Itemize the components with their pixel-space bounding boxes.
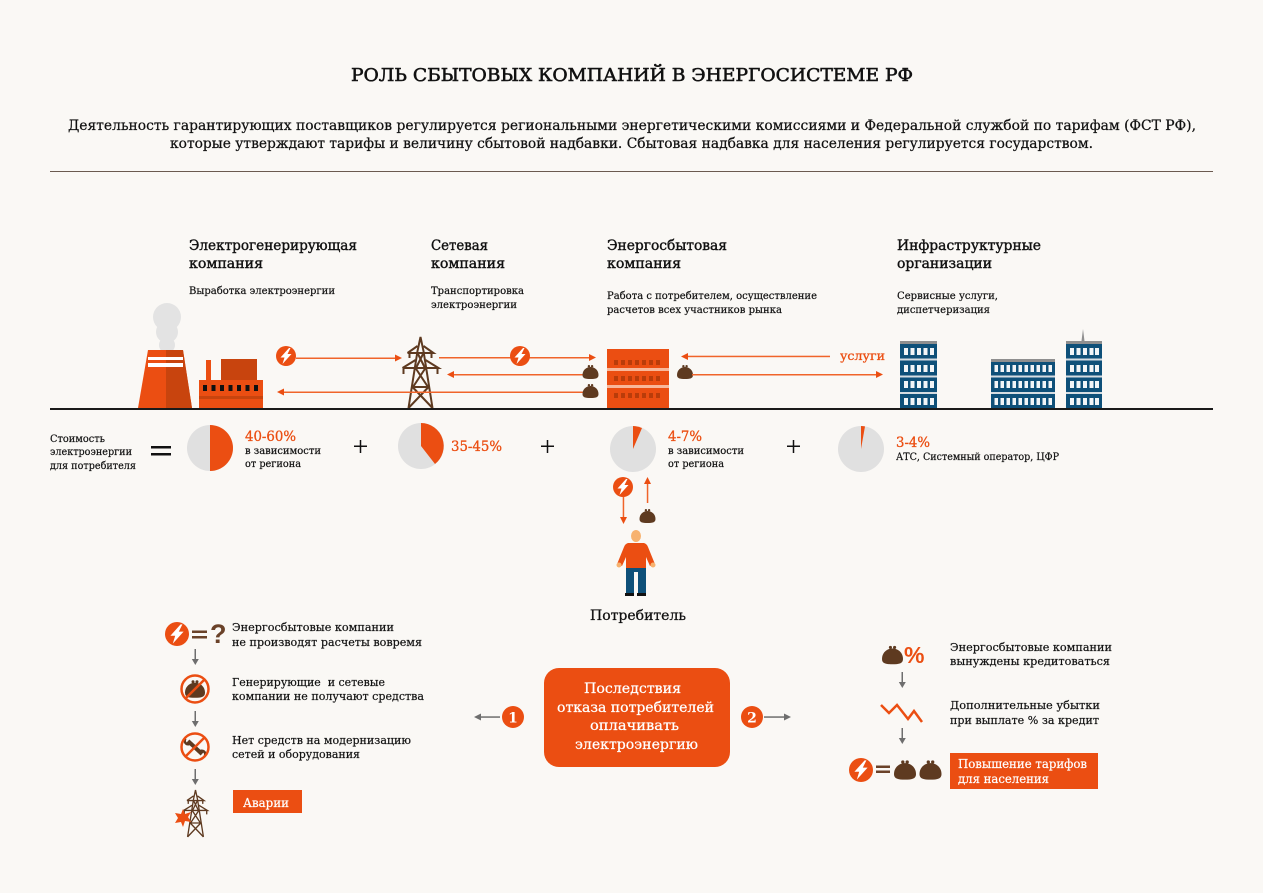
arrow: payment to plant: [277, 384, 598, 398]
heading: generating company: Электрогенерирующая: [189, 238, 357, 254]
arrow: electricity to consumer: [613, 477, 633, 524]
text: extra losses: Дополнительные убытки: [950, 699, 1100, 712]
cost label: Стоимость: [50, 434, 106, 445]
pie: generation share: 40-60%: [245, 429, 296, 445]
badge 1 with arrow: 1: [508, 710, 518, 726]
icon: retail company building: [607, 349, 669, 408]
plus: [354, 440, 367, 453]
intro text: которые утверждают тарифы и величину сбытовой надбавки. Сбытовая надбавка для населения регулируется государством.: [170, 136, 1093, 152]
icon: consumer: [616, 530, 656, 596]
pie: grid share: 35-45%: [451, 439, 502, 455]
heading: infrastructure organisations: Сервисные услуги,: [897, 291, 998, 302]
text: extra losses: [950, 699, 1100, 727]
arrow: payment to infrastructure: [677, 365, 883, 379]
heading: generating company: Выработка электроэнергии: [189, 286, 335, 297]
label: tariff increase: [950, 753, 1098, 789]
text: no modernisation funds: сетей и оборудования: [232, 748, 360, 761]
heading: grid company: компания: [431, 256, 505, 272]
icon: damaged tower: [175, 790, 207, 837]
arrow: [899, 672, 906, 688]
panel: consequences: отказа потребителей: [557, 700, 714, 716]
badge 2 with arrow: 2: [747, 710, 757, 726]
arrow: services from infrastructure: услуги: [840, 348, 885, 363]
label: consumer: Потребитель: [590, 608, 686, 624]
panel: consequences: [544, 668, 730, 767]
pie: infrastructure share: АТС, Системный оператор, ЦФР: [896, 452, 1059, 463]
arrow: payment from consumer: [640, 477, 656, 523]
pie: retail share: 4-7%: [668, 429, 702, 445]
icon: infrastructure building 3: [1066, 329, 1102, 408]
text: companies get no funds: Генерирующие и сетевые: [232, 676, 385, 689]
badge 1 with arrow: [474, 706, 524, 728]
cost label: [50, 434, 136, 472]
heading: infrastructure organisations: Инфраструктурные: [897, 238, 1041, 254]
plus: [787, 440, 800, 453]
icon: electricity equals two purses: [849, 758, 942, 782]
icon: purse and percent: [882, 642, 924, 668]
intro text: [68, 118, 1196, 152]
heading: grid company: Сетевая: [431, 238, 488, 254]
panel: consequences: электроэнергию: [575, 737, 698, 753]
text: no timely payments: Энергосбытовые компании: [232, 621, 394, 634]
pie: generation share: от региона: [245, 459, 301, 470]
pie: retail share: в зависимости: [668, 446, 744, 457]
text: no modernisation funds: [232, 734, 411, 761]
arrow: services from infrastructure: [681, 348, 885, 363]
arrow: [192, 711, 199, 727]
heading: retail company: расчетов всех участников рынка: [607, 305, 782, 316]
ground line: [50, 408, 1213, 410]
cost label: для потребителя: [50, 461, 136, 472]
arrow: electricity from plant to grid: [276, 346, 402, 366]
label: accidents: Аварии: [243, 796, 289, 810]
icon: factory: [199, 359, 263, 408]
pie: generation share: в зависимости: [245, 446, 321, 457]
icon: falling chart: [881, 705, 922, 722]
icon: no repairs: [182, 734, 208, 760]
heading: infrastructure organisations: [897, 238, 1041, 316]
icon: no money: [182, 676, 208, 702]
heading: retail company: Работа с потребителем, осуществление: [607, 291, 817, 302]
badge 2 with arrow: [741, 706, 791, 728]
panel: consequences: Последствия: [584, 681, 681, 697]
equals sign: [151, 446, 171, 456]
heading: generating company: [189, 238, 357, 297]
heading: infrastructure organisations: организации: [897, 256, 992, 272]
text: forced to borrow: Энергосбытовые компании: [950, 641, 1112, 654]
pie: infrastructure share: 3-4%: [896, 435, 930, 451]
text: companies get no funds: компании не получают средства: [232, 690, 424, 703]
title: РОЛЬ СБЫТОВЫХ КОМПАНИЙ В ЭНЕРГОСИСТЕМЕ РФ: [351, 63, 913, 86]
arrow: [192, 769, 199, 785]
label: tariff increase: Повышение тарифов: [958, 757, 1087, 771]
icon: electricity equals question: ?: [210, 619, 226, 649]
heading: retail company: [607, 238, 817, 316]
icon: infrastructure building 1: [900, 341, 937, 408]
heading: grid company: Транспортировка: [431, 286, 524, 297]
icon: transmission tower: [402, 337, 438, 408]
pie: grid share: [398, 423, 502, 469]
pie: generation share: [187, 425, 321, 471]
heading: infrastructure organisations: диспетчеризация: [897, 305, 990, 316]
icon: purse and percent: %: [904, 642, 924, 668]
icon: power plant cooling tower: [138, 303, 192, 408]
arrow: [192, 649, 199, 665]
text: no modernisation funds: Нет средств на модернизацию: [232, 734, 411, 747]
text: companies get no funds: [232, 676, 424, 703]
label: accidents: [233, 790, 302, 813]
heading: grid company: [431, 238, 524, 311]
icon: infrastructure building 2: [991, 359, 1055, 408]
cost label: электроэнергии: [50, 447, 132, 458]
heading: retail company: Энергосбытовая: [607, 238, 727, 254]
arrow: [899, 728, 906, 744]
label: tariff increase: для населения: [958, 772, 1049, 786]
text: forced to borrow: [950, 641, 1112, 668]
intro text: Деятельность гарантирующих поставщиков регулируется региональными энергетическими комиссиями и Федеральной службой по тарифам (ФСТ РФ),: [68, 118, 1196, 134]
pie: retail share: [610, 426, 744, 472]
heading: grid company: электроэнергии: [431, 300, 517, 311]
arrow: electricity from grid to retailer: [439, 346, 596, 366]
text: forced to borrow: вынуждены кредитоваться: [950, 655, 1110, 668]
panel: consequences: оплачивать: [590, 718, 679, 734]
plus: [541, 440, 554, 453]
heading: retail company: компания: [607, 256, 681, 272]
text: extra losses: при выплате % за кредит: [950, 714, 1099, 727]
pie: infrastructure share: [838, 426, 1059, 472]
arrow: payment to grid: [447, 365, 598, 379]
text: no timely payments: не производят расчеты вовремя: [232, 636, 422, 649]
heading: generating company: компания: [189, 256, 263, 272]
icon: electricity equals question: [165, 619, 226, 649]
pie: retail share: от региона: [668, 459, 724, 470]
text: no timely payments: [232, 621, 422, 649]
